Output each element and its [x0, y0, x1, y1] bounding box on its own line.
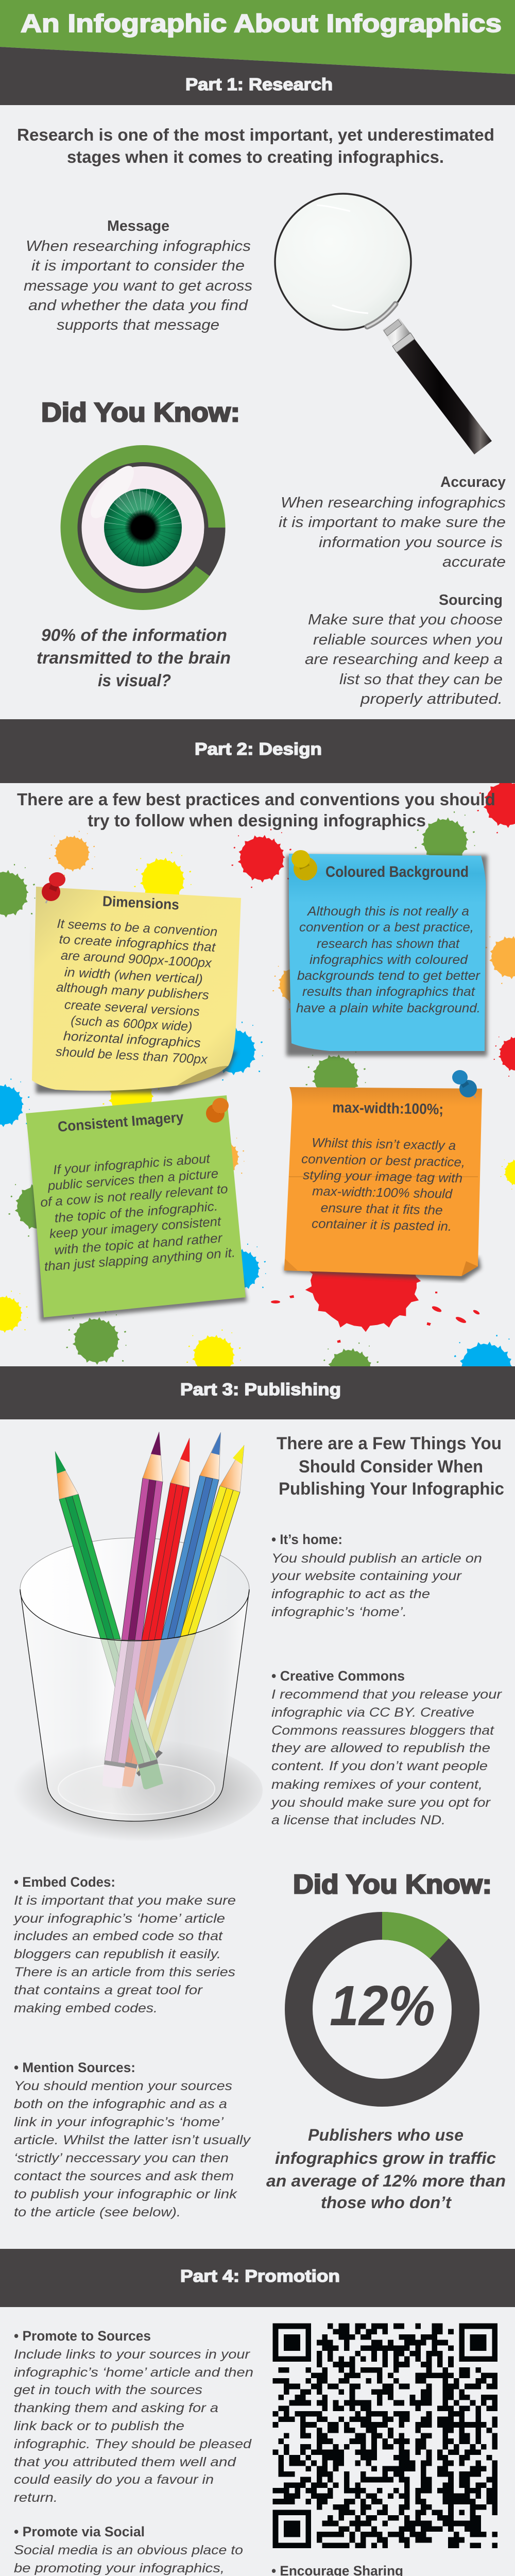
text block: mention sources: to the article (see below).	[14, 2205, 181, 2219]
text block: promote to sources: return.	[14, 2490, 58, 2505]
intro: design	[17, 790, 495, 830]
text block: mention sources: contact the sources and ask them	[14, 2169, 234, 2183]
pencil: green	[55, 1451, 163, 1789]
panel: consistent imagery note	[26, 1095, 247, 1321]
panel: dimensions note: It seems to be a convention	[57, 917, 218, 939]
text block: accuracy: information you source is	[319, 534, 503, 551]
illustration: pencils in a glass	[0, 1432, 263, 1842]
text block: sourcing: reliable sources when you	[313, 632, 503, 648]
text block: creative commons: making remixes of your content,	[271, 1777, 483, 1792]
icon: magnifying glass	[275, 194, 492, 454]
text block: embed codes: making embed codes.	[14, 2001, 158, 2015]
text block: promote via social	[14, 2524, 256, 2576]
caption: 12 percent fact: infographics grow in traffic	[275, 2149, 496, 2167]
header banner	[0, 0, 515, 105]
text block: promote to sources: get in touch with the sources	[14, 2383, 202, 2397]
text block: promote to sources: could easily do you a favour in	[14, 2472, 214, 2487]
text block: promote via social: • Promote via Social	[14, 2524, 145, 2539]
panel: max-width note: Whilst this isn’t exactly a	[312, 1136, 456, 1153]
panel: max-width note	[284, 1070, 482, 1281]
heading: things to consider: Publishing Your Infographic	[279, 1479, 504, 1499]
pencil: red	[118, 1438, 190, 1787]
intro: research: stages when it comes to creating infographics.	[67, 147, 444, 166]
text block: it's home: You should publish an article on	[271, 1551, 482, 1566]
text block: creative commons	[270, 1668, 503, 1827]
caption: 12 percent fact: an average of 12% more than	[266, 2172, 506, 2190]
text block: sourcing: Sourcing	[439, 592, 503, 608]
panel: dimensions note: create several versions	[64, 997, 200, 1019]
text block: mention sources: • Mention Sources:	[14, 2060, 135, 2075]
text block: promote via social: be promoting your infographics,	[14, 2561, 225, 2575]
text block: message: supports that message	[57, 317, 219, 333]
text block: sourcing: Make sure that you choose	[308, 612, 503, 628]
panel: consistent imagery note: public services then a picture	[47, 1166, 219, 1193]
text block: message: and whether the data you find	[28, 297, 248, 314]
text block: creative commons: infographic via CC BY. Creative	[271, 1705, 474, 1720]
panel: consistent imagery note: with the topic at hand rather	[54, 1231, 224, 1258]
text block: promote to sources	[14, 2328, 253, 2505]
chart: 90 percent eye ring	[69, 454, 226, 601]
panel: dimensions note: Dimensions	[102, 893, 180, 913]
text block: creative commons: • Creative Commons	[271, 1668, 405, 1684]
text block: message: Message	[107, 218, 169, 234]
panel: dimensions note: are around 900px-1000px	[60, 948, 213, 971]
panel: max-width note: max-width:100%;	[332, 1099, 443, 1118]
text block: creative commons: they are allowed to republish the	[271, 1741, 490, 1755]
text block: embed codes: There is an article from this series	[14, 1965, 235, 1979]
text block: embed codes: bloggers can republish it easily.	[14, 1947, 221, 1961]
text block: mention sources: You should mention your sources	[14, 2079, 232, 2093]
QR code	[273, 2324, 497, 2548]
text block: it's home: infographic to act as the	[271, 1587, 430, 1601]
text block: embed codes: includes an embed code so that	[14, 1929, 223, 1943]
text block: mention sources: link in your infographic’s ‘home’	[14, 2115, 224, 2129]
chart: 12 percent donut: 12%	[330, 1974, 435, 2038]
heading: part 3 band: Part 3: Publishing	[180, 1380, 341, 1399]
icon: blue push pin	[452, 1070, 477, 1098]
text block: promote via social: Social media is an obvious place to	[14, 2543, 243, 2557]
text block: creative commons: content. If you don’t want people	[271, 1759, 488, 1773]
text block: accuracy: it is important to make sure the	[279, 514, 506, 531]
text block: message	[24, 218, 252, 333]
text block: promote to sources: infographic. They should be pleased	[14, 2437, 252, 2451]
heading: things to consider: There are a Few Things You	[277, 1434, 502, 1453]
text block: it's home: infographic’s ‘home’.	[271, 1605, 407, 1619]
text block: message: message you want to get across	[24, 278, 252, 294]
text block: accuracy: When researching infographics	[281, 495, 506, 511]
panel: coloured background note: infographics with coloured	[310, 953, 468, 967]
panel: consistent imagery note: than just slapping anything on it.	[44, 1245, 236, 1274]
caption: 90 percent fact: is visual?	[98, 671, 171, 690]
panel: consistent imagery note: the topic of the infographic.	[54, 1199, 218, 1226]
panel: dimensions note: (such as 600px wide)	[71, 1013, 193, 1034]
text block: promote to sources: thanking them and asking for a	[14, 2401, 218, 2415]
heading: did you know: Did You Know:	[41, 398, 240, 428]
caption: 90 percent fact	[37, 625, 231, 690]
panel: coloured background note: Although this is not really a	[306, 904, 469, 919]
intro: research	[17, 125, 494, 166]
text block: mention sources: article. Whilst the latter isn’t usually	[14, 2133, 251, 2147]
text block: embed codes: your infographic’s ‘home’ article	[13, 1911, 225, 1926]
text block: mention sources: to publish your infographic or link	[14, 2187, 238, 2201]
caption: 90 percent fact: 90% of the information	[41, 625, 227, 645]
caption: 12 percent fact: those who don’t	[321, 2193, 452, 2212]
panel: coloured background note	[286, 850, 487, 1056]
text block: sourcing: are researching and keep a	[305, 651, 503, 668]
panel: coloured background note: research has shown that	[317, 937, 460, 951]
pencil: blue	[144, 1432, 221, 1716]
text block: creative commons: Commons reassures bloggers that	[271, 1723, 494, 1738]
heading: part 4 band	[0, 2249, 515, 2307]
text block: message: it is important to consider the	[31, 258, 245, 274]
text block: creative commons: I recommend that you release your	[271, 1687, 503, 1702]
pencil: yellow	[136, 1445, 244, 1776]
caption: 90 percent fact: transmitted to the brain	[37, 648, 231, 667]
text block: promote to sources: • Promote to Sources	[14, 2328, 151, 2344]
panel: coloured background note: results than infographics that	[302, 985, 475, 999]
text block: embed codes	[13, 1874, 236, 2015]
panel: dimensions note: to create infographics that	[59, 932, 216, 955]
panel: dimensions note: in width (when vertical)	[64, 965, 203, 987]
text block: sourcing: properly attributed.	[360, 691, 503, 707]
text block: mention sources: ‘strictly’ neccessary you can then	[14, 2151, 229, 2165]
panel: consistent imagery note: If your infographic is about	[53, 1151, 211, 1177]
text block: it's home	[270, 1532, 482, 1619]
intro: design: There are a few best practices and conventions you should	[17, 790, 495, 809]
caption: 12 percent fact	[266, 2126, 506, 2212]
text block: embed codes: It is important that you make sure	[14, 1893, 236, 1908]
text block: sourcing: list so that they can be	[339, 671, 503, 688]
text block: promote to sources: that you attributed them well and	[14, 2455, 236, 2469]
text block: accuracy: Accuracy	[440, 474, 506, 490]
panel: max-width note: styling your image tag with	[303, 1168, 462, 1185]
panel: max-width note: convention or best practice,	[301, 1152, 465, 1170]
panel: max-width note: ensure that it fits the	[320, 1201, 443, 1217]
panel: coloured background note: Coloured Background	[325, 863, 469, 880]
icon: red push pin	[42, 872, 65, 903]
intro: design: try to follow when designing infographics	[88, 811, 426, 830]
text block: mention sources: both on the infographic and as a	[14, 2097, 227, 2111]
heading: part 4 band: Part 4: Promotion	[180, 2266, 340, 2285]
text block: message: When researching infographics	[26, 238, 251, 255]
text block: accuracy: accurate	[442, 554, 506, 570]
panel: consistent imagery note: of a cow is not really relevant to	[40, 1182, 229, 1210]
title: An Infographic About Infographics	[21, 10, 502, 38]
panel: dimensions note: horizontal infographics	[63, 1029, 201, 1050]
panel: max-width note: container it is pasted in.	[312, 1216, 452, 1234]
panel: consistent imagery note: Consistent Imagery	[57, 1109, 184, 1135]
caption: 12 percent fact: Publishers who use	[308, 2126, 464, 2144]
pencil: purple	[102, 1432, 163, 1788]
panel: coloured background note: backgrounds tend to get better	[297, 969, 481, 983]
text block: mention sources	[14, 2060, 251, 2219]
icon: orange push pin	[206, 1098, 229, 1123]
heading: did you know 2: Did You Know:	[293, 1870, 492, 1900]
text block: embed codes: that contains a great tool for	[14, 1983, 203, 1997]
panel: dimensions note: should be less than 700px	[55, 1044, 209, 1067]
panel: dimensions note: although many publishers	[56, 980, 209, 1003]
panel: consistent imagery note: keep your imagery consistent	[49, 1214, 222, 1241]
text block: promote to sources: infographic’s ‘home’ article and then	[14, 2365, 253, 2380]
icon: yellow push pin	[291, 850, 317, 880]
panel: dimensions note	[31, 872, 241, 1093]
paint splatters	[0, 774, 515, 1402]
text block: accuracy	[279, 474, 506, 570]
text block: promote to sources: Include links to your sources in your	[14, 2347, 251, 2362]
text block: it's home: • It’s home:	[271, 1532, 342, 1547]
heading: part 3 band	[0, 1366, 515, 1419]
heading: part 2 band: Part 2: Design	[195, 739, 322, 758]
text block: sourcing	[305, 592, 503, 707]
text block: promote to sources: link back or to publish the	[14, 2419, 184, 2433]
heading: things to consider: Should Consider When	[299, 1457, 483, 1477]
text block: embed codes: • Embed Codes:	[14, 1874, 115, 1890]
panel: coloured background note: convention or a best practice,	[299, 920, 474, 935]
panel: coloured background note: have a plain white background.	[296, 1001, 480, 1015]
panel: max-width note: max-width:100% should	[312, 1184, 453, 1201]
heading: part 2 band	[0, 719, 515, 783]
heading: part 1: Part 1: Research	[185, 75, 333, 94]
chart: 12 percent donut	[299, 1926, 466, 2093]
text block: it's home: your website containing your	[270, 1569, 462, 1583]
heading: things to consider	[277, 1434, 504, 1499]
intro: research: Research is one of the most important, yet underestimated	[17, 125, 494, 144]
text block: creative commons: you should make sure you opt for	[270, 1795, 491, 1810]
text block: creative commons: a license that includes ND.	[271, 1813, 445, 1827]
